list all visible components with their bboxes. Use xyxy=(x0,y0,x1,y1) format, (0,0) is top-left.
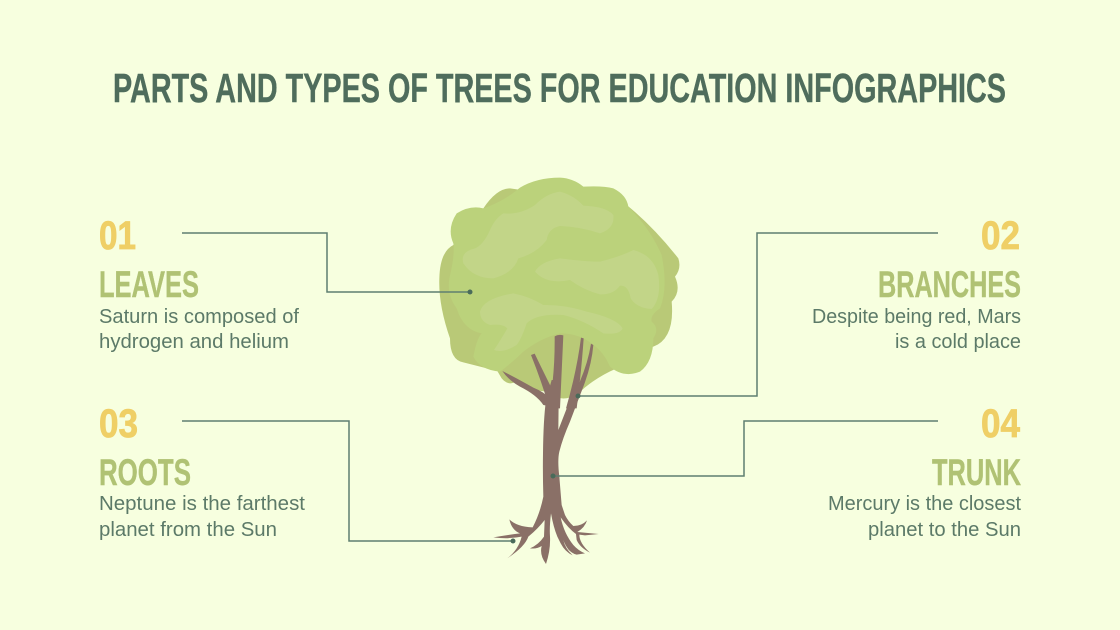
panel: roots: ROOTS xyxy=(99,452,191,493)
connector: leaves xyxy=(182,233,472,294)
panel: roots: 03 xyxy=(99,402,138,446)
panel: leaves: hydrogen and helium xyxy=(99,331,289,353)
panel: branches: 02 xyxy=(981,214,1020,258)
tree illustration xyxy=(439,178,679,564)
panel: trunk: planet to the Sun xyxy=(868,519,1021,541)
panel: trunk: Mercury is the closest xyxy=(828,493,1021,515)
panel: roots: planet from the Sun xyxy=(99,519,277,541)
panel: leaves: Saturn is composed of xyxy=(99,306,299,328)
tree crown xyxy=(439,178,679,398)
connector: trunk xyxy=(550,421,938,478)
connector: branches xyxy=(576,233,938,398)
panel: branches: is a cold place xyxy=(895,331,1021,353)
connector: roots xyxy=(182,421,516,544)
panel: branches xyxy=(812,214,1021,353)
panel: leaves: LEAVES xyxy=(99,264,199,305)
panel: trunk: TRUNK xyxy=(932,452,1021,493)
panel: trunk xyxy=(828,402,1021,541)
panel: leaves: 01 xyxy=(99,214,136,258)
tree trunk and branches xyxy=(493,335,599,564)
panel: roots xyxy=(99,402,305,541)
panel: roots: Neptune is the farthest xyxy=(99,493,305,515)
panel: branches: BRANCHES xyxy=(878,264,1021,305)
panel: branches: Despite being red, Mars xyxy=(812,306,1021,328)
panel: trunk: 04 xyxy=(981,402,1021,446)
panel: leaves xyxy=(99,214,299,353)
